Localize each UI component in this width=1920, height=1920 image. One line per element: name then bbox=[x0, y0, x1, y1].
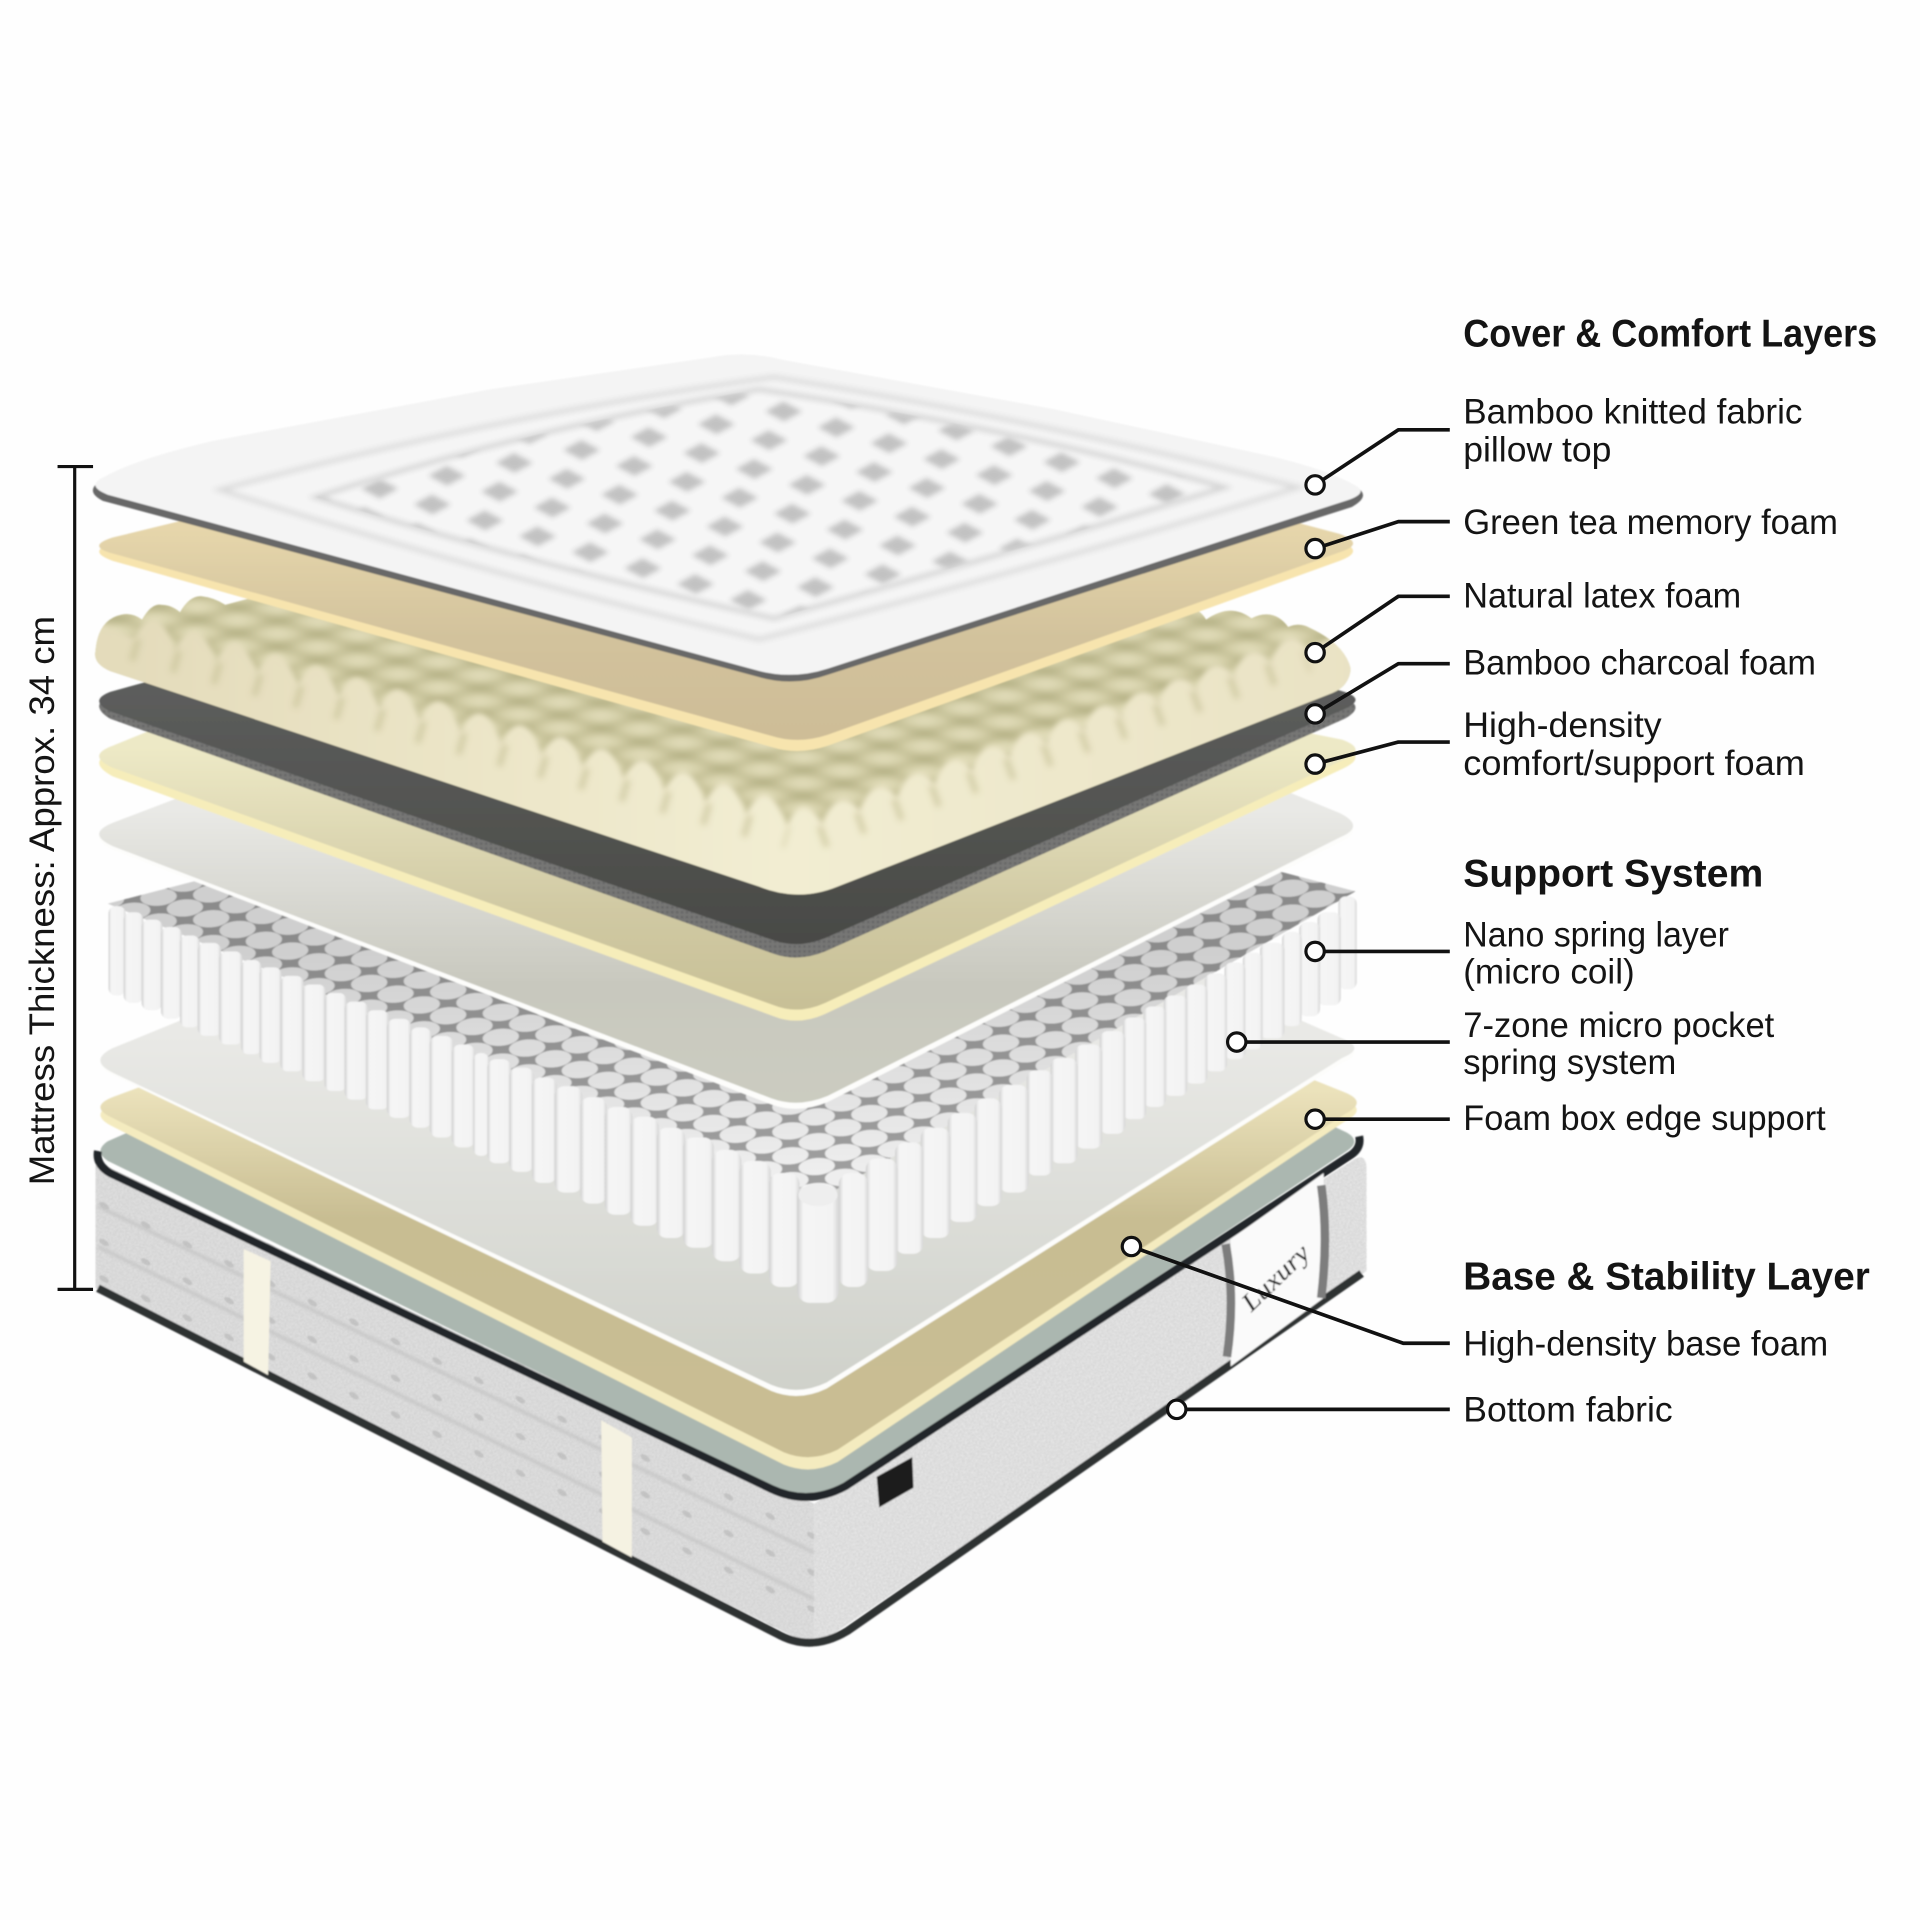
callout: green tea memory foam bbox=[1306, 503, 1838, 558]
latex valley shading right bbox=[820, 661, 1308, 838]
callout: bamboo knitted fabric pillow top: pillow top bbox=[1463, 431, 1611, 470]
handle label panel bbox=[1231, 1173, 1324, 1367]
natural latex foam layer bbox=[94, 595, 1352, 896]
right row of springs bbox=[839, 896, 1357, 1287]
latex valley shading left bbox=[132, 649, 787, 838]
left side fabric bbox=[96, 1161, 814, 1647]
callout: natural latex foam bbox=[1306, 576, 1741, 662]
callout: high-density base foam: High-density base foam bbox=[1463, 1325, 1828, 1364]
logo: Luxury bbox=[1235, 1238, 1316, 1318]
callout: foam box edge support: Foam box edge support bbox=[1463, 1099, 1826, 1138]
callout: foam box edge support bbox=[1306, 1099, 1826, 1138]
strap centre bbox=[601, 1420, 632, 1558]
front spring bbox=[797, 1184, 839, 1303]
callout: bottom fabric: Bottom fabric bbox=[1463, 1391, 1673, 1430]
callout: bamboo knitted fabric pillow top: Bamboo knitted fabric bbox=[1463, 393, 1802, 432]
callout: nano spring layer: (micro coil) bbox=[1463, 952, 1635, 991]
callout: high-density comfort support foam: High-density bbox=[1463, 706, 1662, 745]
latex base colour bbox=[86, 453, 1359, 906]
callout: 7-zone micro pocket spring system: 7-zone micro pocket bbox=[1463, 1006, 1775, 1045]
callout: nano spring layer: Nano spring layer bbox=[1463, 916, 1729, 955]
exploded mattress illustration bbox=[73, 354, 1384, 1647]
pillow surface bbox=[95, 354, 1361, 675]
bamboo charcoal foam layer bbox=[99, 514, 1356, 958]
pocket spring block bbox=[108, 735, 1357, 1303]
callout: bamboo charcoal foam: Bamboo charcoal foam bbox=[1463, 644, 1816, 683]
high-density comfort support foam layer bbox=[99, 643, 1356, 1021]
latex egg-crate surface bbox=[104, 596, 1330, 824]
callout: high-density comfort support foam bbox=[1306, 706, 1805, 783]
callout: bottom fabric bbox=[1168, 1391, 1673, 1430]
inner quilting seam bbox=[316, 389, 1224, 618]
right side fabric bbox=[814, 1157, 1367, 1647]
outer quilting seam bbox=[220, 377, 1298, 639]
lower light grey foam layer bbox=[100, 784, 1354, 1396]
callout: bamboo charcoal foam bbox=[1306, 644, 1816, 723]
dimension line: mattress thickness bbox=[22, 467, 93, 1289]
mattress base with bottom fabric bbox=[96, 857, 1367, 1647]
callout: nano spring layer bbox=[1306, 916, 1729, 991]
bamboo knitted pillow top bbox=[93, 354, 1363, 681]
callout: bamboo knitted fabric pillow top bbox=[1306, 393, 1802, 494]
black tag bbox=[877, 1457, 913, 1507]
callout: high-density comfort support foam: comfort/support foam bbox=[1463, 744, 1805, 783]
spring tops bbox=[108, 735, 1356, 1200]
foam box edge support layer bbox=[100, 857, 1357, 1469]
lower piping bbox=[98, 1273, 1362, 1643]
callout: natural latex foam: Natural latex foam bbox=[1463, 576, 1741, 615]
left fabric stitch dots bbox=[96, 1161, 814, 1647]
heading: Base & Stability Layer: Base & Stability Layer bbox=[1463, 1255, 1870, 1298]
upper piping bbox=[98, 1136, 1360, 1497]
strap left bbox=[244, 1249, 271, 1375]
callout: 7-zone micro pocket spring system: spring system bbox=[1463, 1043, 1676, 1082]
dimension label: Mattress Thickness: Approx. 34 cm bbox=[22, 616, 62, 1185]
callout: 7-zone micro pocket spring system bbox=[1228, 1006, 1775, 1082]
pillow underside edge bbox=[93, 362, 1363, 681]
green tea memory foam layer bbox=[99, 380, 1353, 751]
upper light grey foam layer bbox=[99, 576, 1353, 1109]
heading: Support System: Support System bbox=[1463, 853, 1763, 896]
inner quilted tufts bbox=[360, 392, 1185, 614]
left row of springs bbox=[108, 906, 800, 1287]
callout: green tea memory foam: Green tea memory foam bbox=[1463, 503, 1838, 542]
heading: Cover & Comfort Layers: Cover & Comfort Layers bbox=[1463, 313, 1877, 356]
callout: high-density base foam bbox=[1122, 1237, 1828, 1364]
latex front scalloped edge bbox=[95, 621, 1351, 896]
top panel bbox=[100, 857, 1354, 1496]
